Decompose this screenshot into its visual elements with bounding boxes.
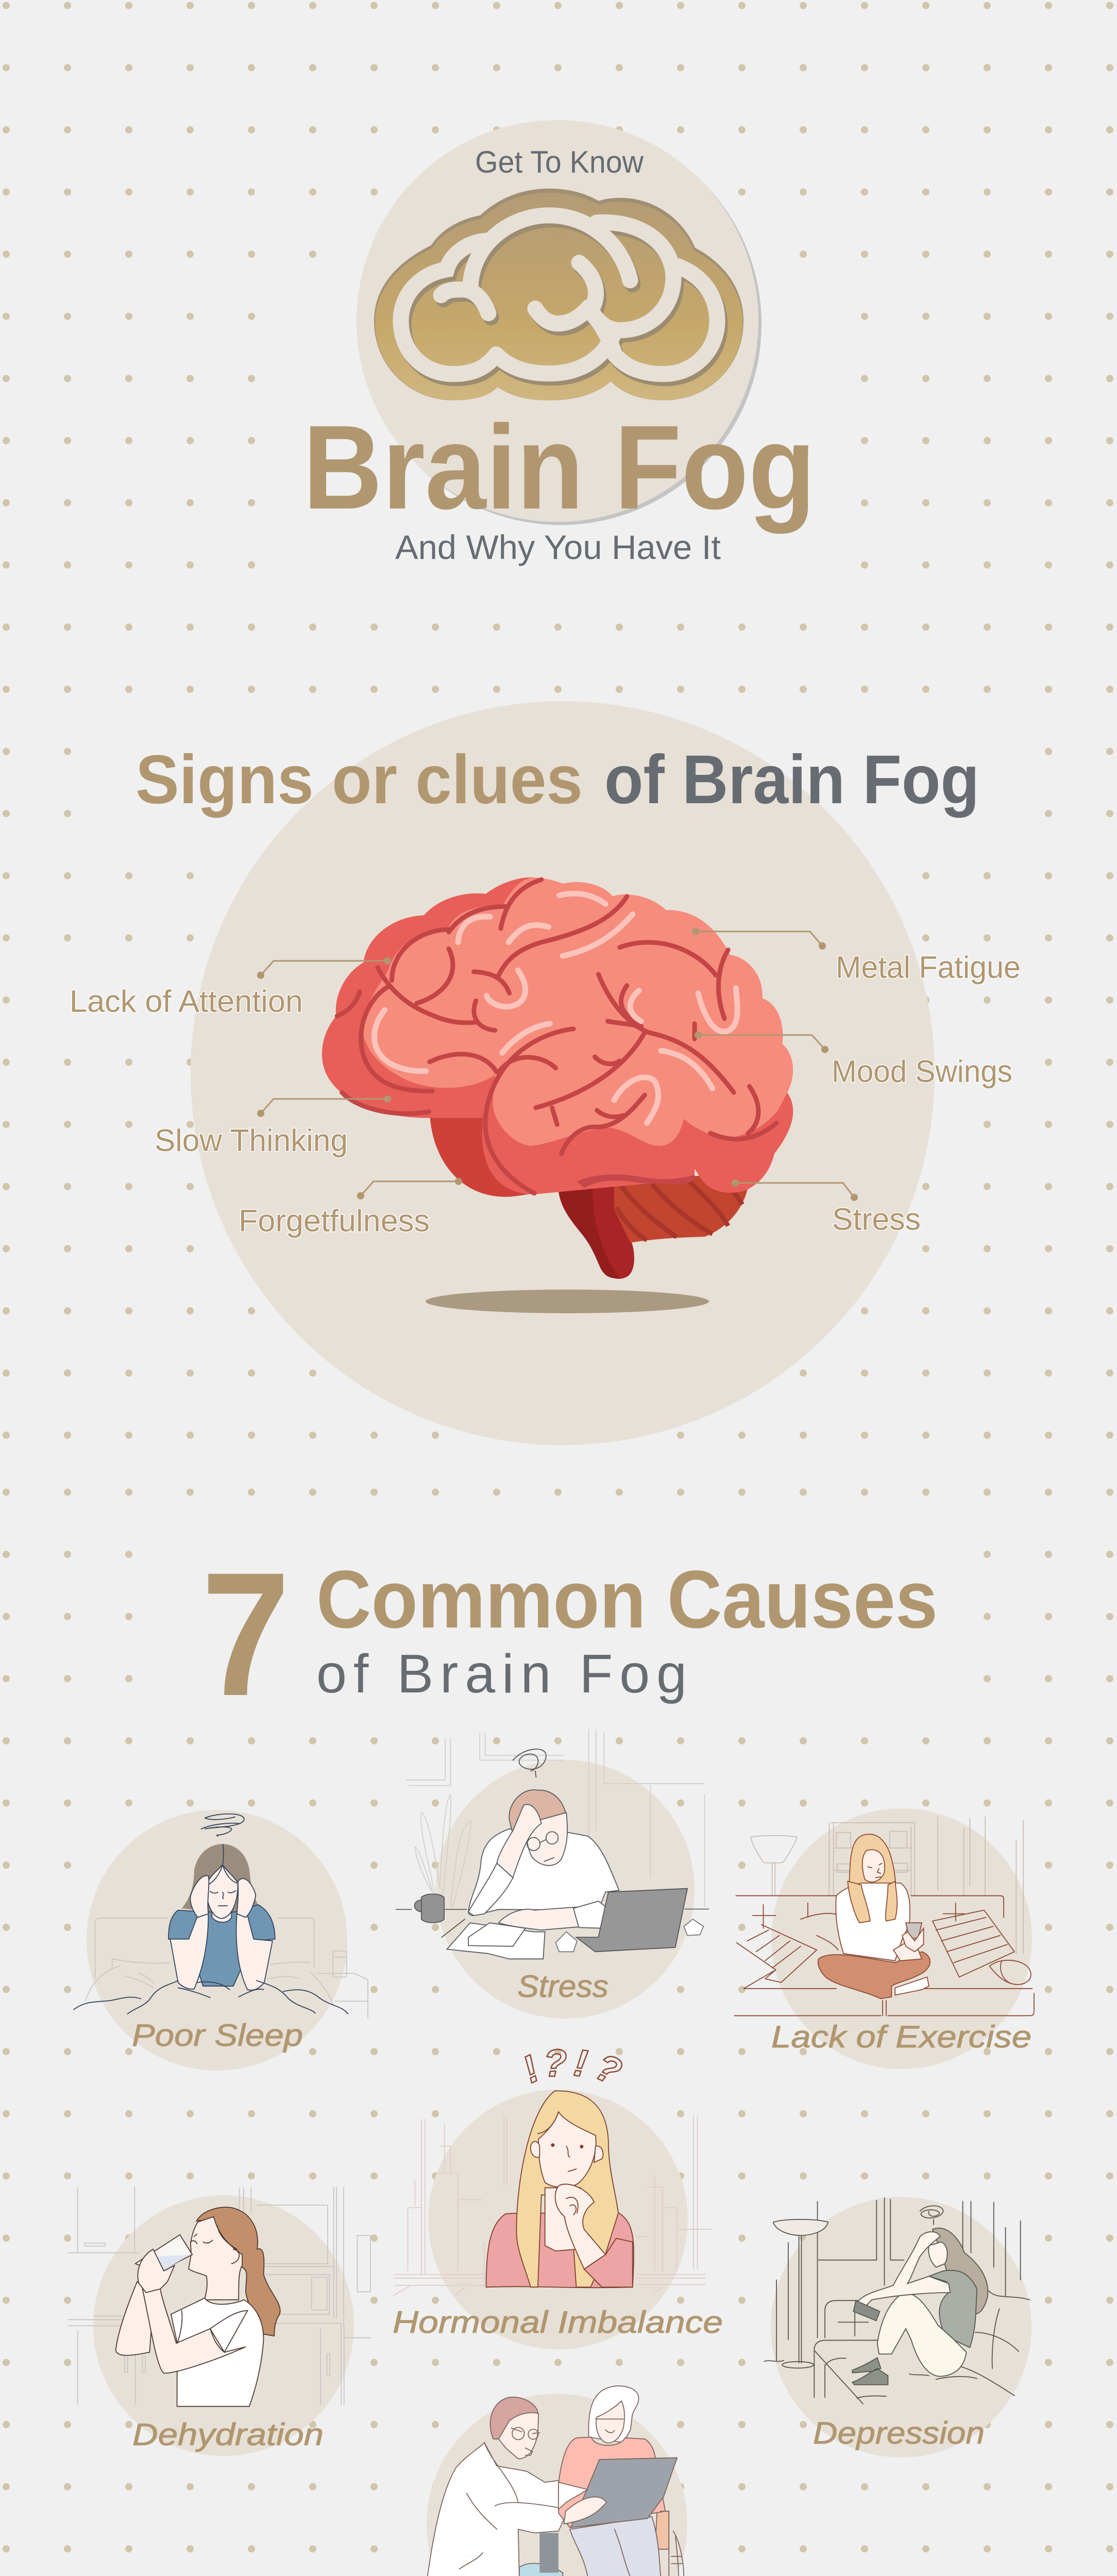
circle: [428, 2090, 688, 2349]
illustration: woman drinking: [69, 2187, 370, 2406]
illustration: woman on sofa: [735, 1817, 1034, 2015]
label: Lack of Exercise: [771, 2020, 1031, 2054]
circle: [436, 1760, 695, 2019]
label: lack of attention: Lack of Attention: [70, 984, 303, 1019]
panel: stress: [396, 1730, 709, 2019]
label: mood swings: Mood Swings: [832, 1054, 1012, 1089]
question and exclamation marks: [516, 2041, 628, 2093]
icon: brain logo: [374, 189, 743, 400]
shadow under brain: [426, 1290, 709, 1313]
illustration: doctor and patient: [428, 2386, 684, 2576]
label: forgetfulness: Forgetfulness: [239, 1204, 430, 1238]
panel: causes heading: [201, 1536, 938, 1733]
question and exclamation marks: ?: [589, 2045, 628, 2093]
panel: dehydration: [69, 2187, 370, 2456]
label: Poor Sleep: [132, 2018, 303, 2053]
panel: depression: [765, 2197, 1031, 2458]
panel: chronic diseases: [427, 2386, 703, 2576]
panel: lack of exercise: [735, 1808, 1034, 2069]
label: stress: Stress: [832, 1202, 921, 1236]
hero circle shadow: [360, 123, 761, 525]
hero circle: [357, 120, 758, 522]
heading: common causes: Common Causes: [316, 1553, 938, 1645]
dot pattern middle: [0, 1463, 1117, 2576]
heading: of brain fog: of Brain Fog: [604, 741, 979, 818]
illustration: brain: [322, 877, 793, 1279]
circle: [771, 1808, 1032, 2069]
label: Hormonal Imbalance: [393, 2305, 723, 2340]
label: metal fatigue: Metal Fatigue: [836, 950, 1021, 985]
question and exclamation marks: !: [516, 2047, 546, 2091]
illustration: sad woman on sofa: [765, 2198, 1030, 2404]
circle: [87, 1810, 347, 2071]
text: get to know: Get To Know: [475, 145, 644, 179]
signs background circle: [191, 701, 935, 1445]
numeral 7: 7: [201, 1536, 290, 1733]
dot pattern upper: [0, 0, 1117, 1463]
illustration: thinking woman: [394, 2091, 713, 2295]
panel: signs: [70, 701, 1021, 1445]
label: Depression: [813, 2416, 985, 2450]
title: brain fog: Brain Fog: [303, 401, 816, 534]
illustration: stressed man at laptop: [396, 1730, 709, 1959]
circle: [771, 2197, 1031, 2458]
circle: [427, 2394, 687, 2576]
question and exclamation marks: ?: [544, 2042, 567, 2084]
panel: hormonal imbalance: [393, 2041, 723, 2349]
question and exclamation marks: !: [571, 2041, 590, 2085]
panel: poor sleep: [74, 1810, 368, 2071]
heading: of brain fog: of Brain Fog: [316, 1643, 687, 1704]
heading: signs or clues: Signs or clues: [136, 741, 583, 818]
panel: hero: [303, 120, 816, 566]
illustration: woman in bed: [74, 1814, 368, 2018]
circle: [93, 2195, 354, 2456]
label: slow thinking: Slow Thinking: [155, 1123, 348, 1158]
leader lines: [257, 928, 858, 1201]
subtitle: And Why You Have It: [395, 528, 721, 566]
label: Dehydration: [132, 2417, 324, 2452]
dot clearing areas behind text: [62, 289, 1025, 1716]
label: Stress: [517, 1969, 608, 2004]
